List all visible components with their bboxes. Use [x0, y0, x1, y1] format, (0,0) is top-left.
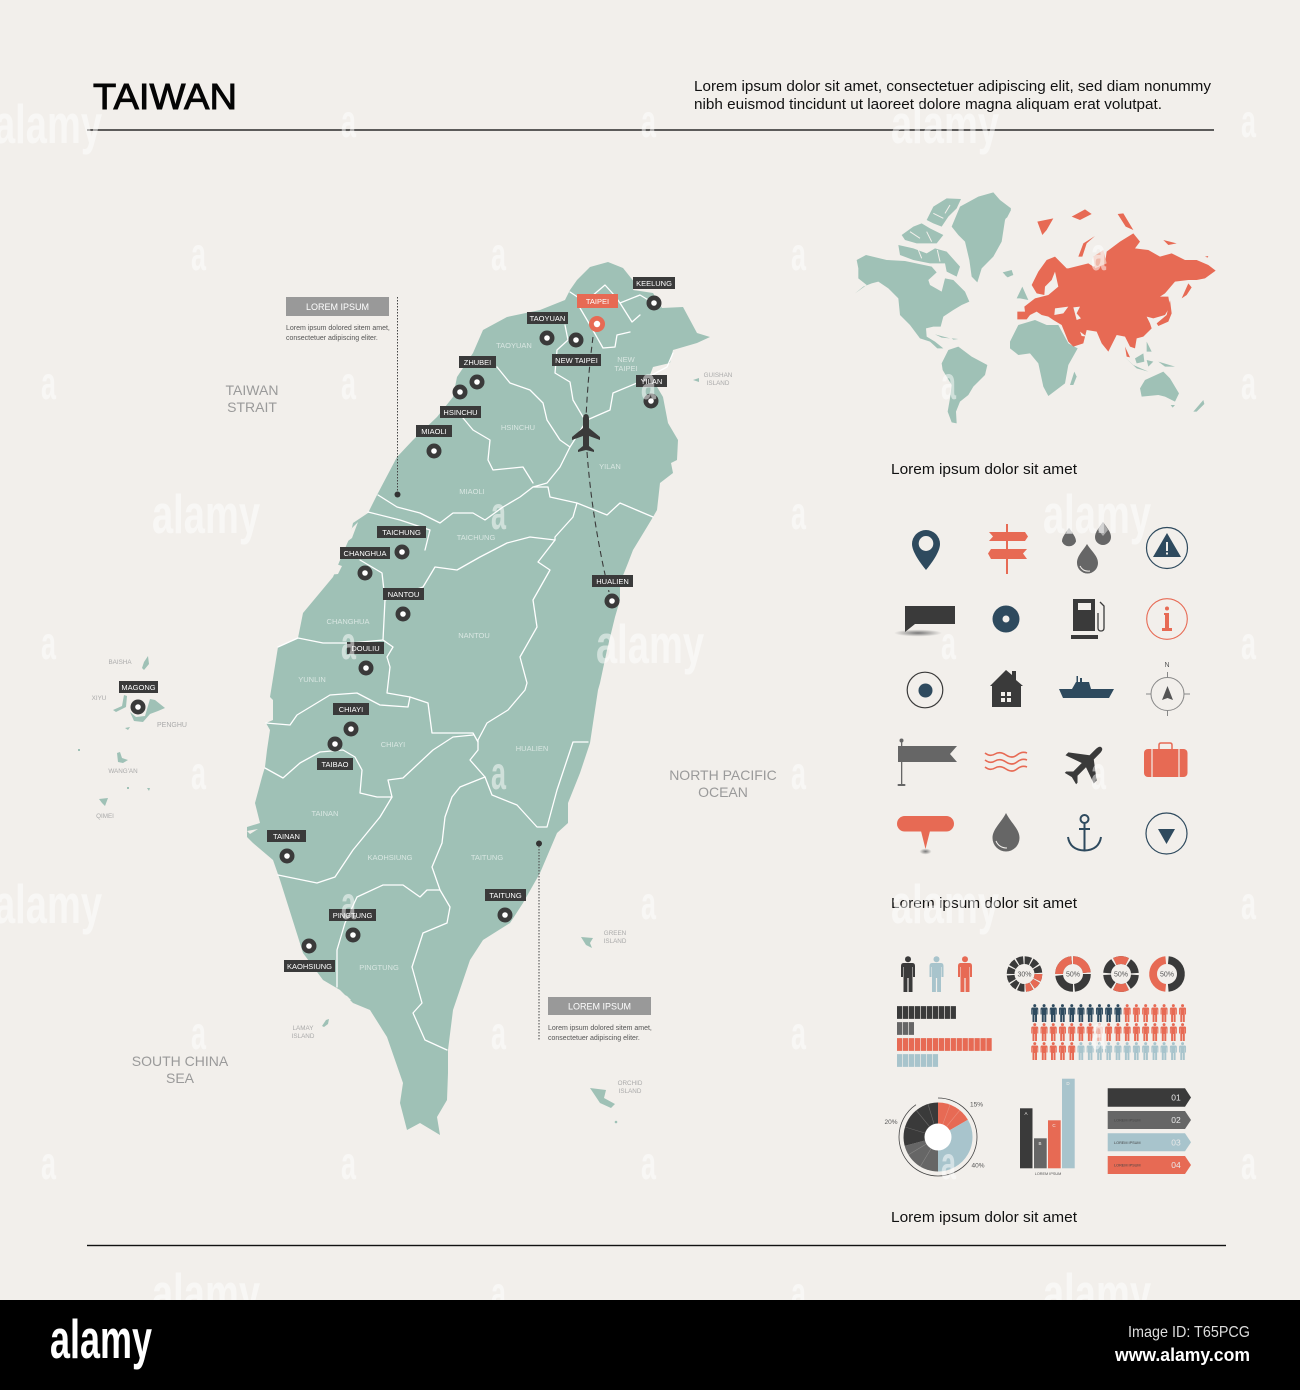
island names: ORCHID [618, 1080, 643, 1087]
watermarks: a [941, 617, 956, 669]
island labels: QIMEI [96, 813, 114, 820]
watermarks: a [641, 95, 656, 147]
icon: anchor [1068, 815, 1101, 850]
map: Taiwan [247, 262, 710, 1135]
Afro-Eurasia and Oceania [1005, 207, 1216, 412]
bar chart: A [1024, 1111, 1028, 1116]
city: Tainan [267, 830, 306, 864]
city: Hualien [592, 575, 633, 608]
watermarks: a [641, 877, 656, 929]
donut 50% b: 50% [1114, 972, 1128, 978]
arrow 03: 03 [1171, 1137, 1181, 1147]
icon: plane [572, 414, 600, 452]
city: Taibao [317, 736, 353, 770]
segmented bars [897, 1012, 992, 1060]
district labels: TAICHUNG [457, 533, 495, 542]
watermarks: a [341, 1137, 356, 1189]
city: Miaoli: MIAOLI [421, 427, 447, 436]
icon: water drops [1062, 522, 1111, 574]
island labels: PENGHU [157, 722, 187, 729]
city: Zhubei [459, 356, 496, 390]
people grid [1031, 1004, 1186, 1060]
arrow 02: 02 [1171, 1115, 1181, 1125]
district labels: CHANGHUA [327, 617, 369, 626]
other islands [292, 372, 733, 1123]
watermarks: a [791, 487, 806, 539]
watermarks: alamy [1043, 1262, 1151, 1324]
footer bar [0, 1300, 1300, 1390]
watermarks: a [1241, 877, 1256, 929]
city: Nantou [383, 588, 424, 622]
icon: disc [992, 606, 1020, 632]
sea label: Taiwan Strait: TAIWAN [226, 382, 278, 398]
watermarks: a [1241, 1137, 1256, 1189]
caption: icons: Lorem ipsum dolor sit amet [891, 896, 1077, 912]
watermarks: a [1091, 228, 1106, 280]
sea label: South China Sea: SEA [166, 1070, 195, 1086]
bar chart: C [1052, 1123, 1056, 1128]
city: Tainan: TAINAN [273, 832, 300, 841]
district labels: CHIAYI [381, 740, 405, 749]
island labels [92, 659, 187, 820]
city: Changhua [340, 547, 390, 580]
watermarks: a [341, 357, 356, 409]
icon: signpost [988, 524, 1028, 574]
icon: drop [992, 813, 1020, 852]
watermarks: a [191, 228, 206, 280]
arrow 02: LOREM IPSUM [1114, 1118, 1141, 1122]
watermarks: a [341, 95, 356, 147]
watermarks: a [641, 1137, 656, 1189]
watermarks: alamy [152, 1262, 260, 1324]
watermarks: alamy [891, 93, 999, 155]
district labels: TAIPEI [614, 364, 638, 373]
Americas and Greenland [855, 192, 1013, 423]
sea label: South China Sea [132, 1053, 229, 1086]
pie chart: 15% [970, 1102, 983, 1108]
watermarks: a [491, 1267, 506, 1319]
sea label: Taiwan Strait: STRAIT [227, 399, 277, 415]
arrow 03 [1108, 1133, 1191, 1151]
caption: world map: Lorem ipsum dolor sit amet [891, 462, 1077, 478]
pie chart [884, 1098, 985, 1176]
donut 50% b [1102, 955, 1140, 993]
district labels: YUNLIN [298, 675, 326, 684]
watermarks: a [491, 747, 506, 799]
watermarks: a [191, 1007, 206, 1059]
bar chart: LOREM IPSUM [1035, 1172, 1061, 1176]
island names: LAMAY [293, 1025, 314, 1032]
sea label: North Pacific Ocean: NORTH PACIFIC [669, 767, 777, 783]
city: Keelung [633, 277, 675, 310]
arrow 04 [1108, 1156, 1191, 1174]
watermarks: a [1241, 95, 1256, 147]
sea label: Taiwan Strait [226, 382, 278, 415]
city: New Taipei [552, 332, 601, 366]
city: Taibao: TAIBAO [322, 760, 349, 769]
callout: bottom: Lorem ipsum dolored sitem amet, [548, 1025, 652, 1032]
footer bar: www.alamy.com [1114, 1345, 1250, 1365]
icon: waves [985, 752, 1027, 771]
district labels: HSINCHU [501, 423, 535, 432]
icon: airplane [1056, 733, 1116, 793]
city: Miaoli [416, 425, 452, 458]
numbered arrows [1108, 1088, 1191, 1174]
city: Taichung: TAICHUNG [382, 528, 421, 537]
district labels: NEW [617, 355, 636, 364]
pie chart: 20% [884, 1119, 898, 1126]
sea label: North Pacific Ocean: OCEAN [698, 784, 748, 800]
district labels: TAINAN [312, 809, 338, 818]
callout: top [286, 297, 400, 498]
city: Magong [119, 681, 158, 714]
city: Taoyuan: TAOYUAN [530, 314, 565, 323]
district labels: KAOHSIUNG [367, 853, 413, 862]
caption: charts: Lorem ipsum dolor sit amet [891, 1210, 1077, 1226]
watermarks: alamy [596, 613, 704, 675]
city: Yilan [636, 375, 667, 408]
district labels [298, 341, 638, 972]
district labels: MIAOLI [459, 487, 485, 496]
island names: GREEN [604, 930, 627, 937]
watermarks: alamy [1043, 483, 1151, 545]
intro text [694, 79, 1212, 113]
watermarks: a [1241, 617, 1256, 669]
city: Kaohsiung [284, 938, 335, 972]
pie chart: 40% [971, 1162, 985, 1170]
city: Changhua: CHANGHUA [344, 549, 386, 558]
donut 50% a: 50% [1066, 972, 1080, 978]
island names: GUISHAN [704, 372, 733, 379]
land outline [247, 262, 710, 1135]
icon: flag [898, 738, 957, 786]
city: Chiayi: CHIAYI [339, 705, 363, 714]
icon: red marker [897, 816, 954, 854]
watermarks: a [1241, 357, 1256, 409]
island labels: XIYU [92, 695, 107, 702]
city: Kaohsiung: KAOHSIUNG [287, 962, 332, 971]
icon: compass [1146, 662, 1190, 716]
callout: bottom: consectetuer adipiscing eliter. [548, 1035, 640, 1042]
city: Keelung: KEELUNG [636, 279, 672, 288]
city: Douliu [347, 642, 384, 676]
callout: top: Lorem ipsum dolored sitem amet, [286, 325, 390, 332]
watermarks: a [791, 1267, 806, 1319]
city: Chiayi [333, 703, 369, 736]
watermarks: a [341, 617, 356, 669]
city: Pingtung: PINGTUNG [333, 911, 372, 920]
donut 50% c: 50% [1160, 972, 1174, 978]
city: Hualien: HUALIEN [596, 577, 629, 586]
city: Yilan: YILAN [641, 377, 662, 386]
district labels: YILAN [599, 462, 621, 471]
icon: warning [1146, 528, 1188, 568]
callout: top: consectetuer adipiscing eliter. [286, 335, 378, 342]
watermarks: a [491, 228, 506, 280]
icon set [894, 522, 1190, 854]
callout: bottom [536, 840, 652, 1042]
watermarks: alamy [152, 483, 260, 545]
icon: info [1147, 599, 1187, 639]
footer bar: alamy [50, 1308, 152, 1370]
city: Hsinchu: HSINCHU [443, 408, 478, 417]
bar chart: B [1038, 1141, 1042, 1146]
icon: speech flag [894, 606, 955, 636]
island labels: WANG'AN [108, 768, 138, 775]
watermarks: a [41, 1137, 56, 1189]
watermarks: a [791, 747, 806, 799]
donut 30% [1011, 960, 1038, 988]
inland seas [1054, 307, 1087, 337]
watermarks: a [941, 1137, 956, 1189]
city: Zhubei: ZHUBEI [464, 358, 491, 367]
callout: top: LOREM IPSUM [306, 302, 369, 312]
intro text: nibh euismod tincidunt ut laoreet dolore magna aliquam erat volutpat. [694, 97, 1162, 113]
arrow 01: 01 [1171, 1092, 1181, 1102]
callout: bottom: LOREM IPSUM [568, 1002, 631, 1012]
city: Nantou: NANTOU [388, 590, 419, 599]
Penghu islands [78, 656, 187, 820]
coastal inlets [247, 522, 358, 1000]
island names [292, 372, 733, 1095]
island names: ISLAND [619, 1088, 642, 1095]
icon: ship [1059, 676, 1114, 698]
arrow 03: LOREM IPSUM [1114, 1141, 1141, 1145]
watermarks: a [341, 877, 356, 929]
city: Hsinchu [440, 384, 481, 418]
bar chart [1020, 1079, 1075, 1176]
intro text: Lorem ipsum dolor sit amet, consectetuer adipiscing elit, sed diam nonummy [694, 79, 1212, 95]
watermarks: a [191, 747, 206, 799]
icon: location pin [912, 530, 940, 570]
district labels: PINGTUNG [359, 963, 399, 972]
arrow 02 [1108, 1111, 1191, 1129]
watermarks: a [1091, 747, 1106, 799]
district labels: NANTOU [458, 631, 490, 640]
island names: ISLAND [707, 380, 730, 387]
footer bar: Image ID: T65PCG [1128, 1324, 1250, 1341]
sea label: South China Sea: SOUTH CHINA [132, 1053, 229, 1069]
watermarks: a [641, 357, 656, 409]
city: Taoyuan [527, 312, 568, 346]
title: TAIWAN [93, 76, 237, 117]
city: New Taipei: NEW TAIPEI [555, 356, 598, 365]
watermarks: a [791, 228, 806, 280]
icon: compass: N [1164, 662, 1170, 669]
city: Taitung: TAITUNG [489, 891, 522, 900]
district labels: TAOYUAN [496, 341, 532, 350]
city: Taipei capital: TAIPEI [586, 297, 609, 306]
donut 50% c [1152, 959, 1182, 989]
island labels: BAISHA [108, 659, 132, 666]
city: Taitung [485, 889, 526, 922]
sea label: North Pacific Ocean [669, 767, 777, 800]
flight route [586, 337, 609, 592]
icon: fuel pump [1071, 599, 1104, 639]
people icons [901, 956, 972, 992]
bar chart: D [1066, 1081, 1070, 1086]
city: Magong: MAGONG [121, 683, 156, 692]
icon: suitcase [1144, 743, 1188, 777]
watermarks: a [41, 617, 56, 669]
city: Taichung [377, 526, 426, 560]
district labels: HUALIEN [516, 744, 548, 753]
island names: ISLAND [604, 938, 627, 945]
watermarks: a [1091, 1007, 1106, 1059]
city: Douliu: DOULIU [351, 644, 380, 653]
donut charts [1011, 955, 1182, 993]
arrow 04: 04 [1171, 1160, 1181, 1170]
donut 50% a [1059, 960, 1087, 988]
district borders [265, 285, 673, 1050]
icon: target [907, 672, 943, 708]
watermarks: a [941, 357, 956, 409]
watermarks: a [791, 1007, 806, 1059]
city: Pingtung [329, 909, 376, 942]
watermarks: a [491, 1007, 506, 1059]
watermarks: a [41, 357, 56, 409]
arrow 04: LOREM IPSUM [1114, 1164, 1141, 1168]
donut 30%: 30% [1017, 972, 1032, 978]
city: Taipei capital [577, 294, 618, 332]
watermarks: a [491, 487, 506, 539]
district labels: TAITUNG [471, 853, 503, 862]
world map [855, 192, 1216, 423]
icon: house [990, 670, 1023, 707]
watermarks: alamy [891, 873, 999, 935]
icon: down circle [1146, 813, 1187, 854]
island names: ISLAND [292, 1033, 315, 1040]
